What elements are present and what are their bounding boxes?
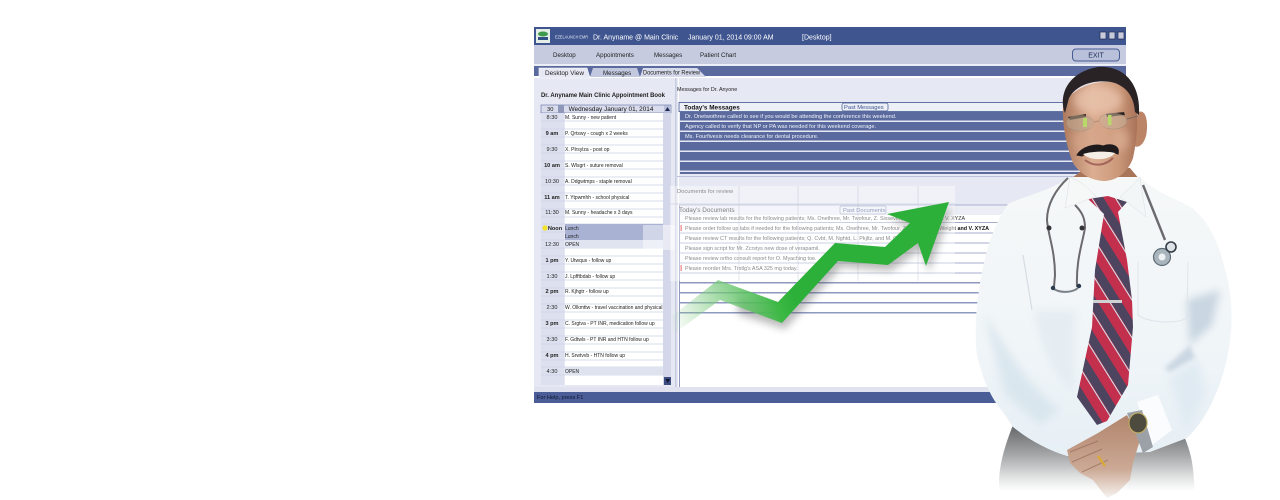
appointment times: 12:30 [545, 242, 559, 248]
hair [1063, 67, 1139, 115]
appointment times: 9 am [546, 131, 558, 137]
appointment times: 2:30 [547, 305, 557, 311]
appointment times: 2 pm [545, 289, 559, 295]
panel: messages: Agency called to verify that NP or PA was needed for this weekend coverage. [685, 124, 876, 130]
appointment times: 9:30 [547, 147, 557, 153]
panel: documents: Past Documents [843, 208, 886, 214]
stethoscope right tube and chest piece [1143, 185, 1176, 266]
necktie [1077, 196, 1133, 425]
panel: appointment book [541, 92, 671, 385]
appointment times: 4:30 [547, 369, 557, 375]
panel: documents: Please review CT results for the following patients; Q. Cvbt, M. Nghtd, L. Pkjltz, and M. Oneone [685, 236, 912, 242]
appointment entries: OPEN [565, 369, 580, 375]
translucent spreadsheet overlay [643, 186, 955, 281]
appointment times: 11 am [544, 195, 560, 201]
tab strip: Messages [603, 70, 631, 77]
title bar: January 01, 2014 09:00 AM [688, 34, 774, 42]
panel: messages: Ms. Fourfivesix needs clearance for dental procedure. [685, 134, 819, 140]
title bar: EZELAUNCH EMR [555, 34, 588, 40]
moustache [1077, 145, 1118, 156]
appointment entries: OPEN [565, 242, 580, 248]
appointment entries: Lunch [565, 226, 579, 232]
panel: documents: Today's Documents [679, 207, 735, 214]
tab strip: Desktop View [545, 70, 584, 77]
panel: documents: Please review lab results for the following patients; Ms. Onethree, Mr. Twofour, Z. Sixseven, F. Eightnine and V. XYZA [685, 216, 966, 222]
panel: appointment book: 30 [547, 107, 553, 113]
title bar: [Desktop] [802, 34, 832, 42]
appointment entries: T. Ytpwmhh - school physical [565, 195, 629, 201]
panel: messages: Today's Messages [684, 104, 740, 111]
title bar: Dr. Anyname @ Main Clinic [593, 34, 679, 42]
panel: messages: Dr. Onetwothree called to see if you would be attending the conference this weekend. [685, 114, 897, 120]
appointment times: 10:30 [545, 179, 559, 185]
trousers [999, 425, 1195, 500]
eyebrows [1068, 114, 1086, 120]
panel: documents: Documents for review [677, 189, 734, 195]
appointment times: 3:30 [547, 337, 557, 343]
panel: documents [534, 189, 1126, 392]
doctor portrait [970, 67, 1240, 500]
appointment entries: S. Wlsgrt - suture removal [565, 163, 623, 169]
appointment entries: P. Qrtswy - cough x 2 weeks [565, 131, 628, 137]
panel: messages [677, 87, 1126, 177]
divider between panes [675, 78, 676, 390]
wristwatch [1127, 410, 1153, 453]
appointment entries: A. Ddgwtmps - staple removal [565, 179, 632, 185]
menu bar: EXIT [1088, 52, 1105, 60]
menu bar: Appointments [596, 52, 634, 59]
appointment times: 1 pm [545, 258, 559, 264]
appointment times: 1:30 [547, 274, 557, 280]
appointment times [544, 115, 563, 375]
appointment times: 4 pm [545, 353, 559, 359]
appointment times: Noon [548, 226, 563, 232]
application window [534, 27, 1126, 403]
appointment entries [565, 115, 663, 375]
appointment entries: W. Olkmttw - travel vaccination and physical [565, 305, 663, 311]
head [1063, 67, 1147, 181]
smile [1083, 152, 1115, 159]
appointment times: 8:30 [547, 115, 557, 121]
appointment entries: J. Lpfftbdab - follow up [565, 274, 615, 280]
panel: appointment book: Dr. Anyname Main Clinic Appointment Book [541, 92, 665, 99]
shirt collar [1065, 177, 1146, 217]
nose [1089, 120, 1109, 145]
tab strip: Documents for Review [643, 70, 700, 76]
panel: appointment book: Wednesday January 01, 2014 [569, 106, 654, 113]
appointment times: 11:30 [545, 210, 559, 216]
panel: messages: Past Messages [844, 105, 884, 111]
appointment entries: F. Gdtwls - PT INR and HTN follow up [565, 337, 649, 343]
panel: documents: Please reorder Mrs. Trstlg's ASA 325 mg today. [685, 266, 798, 272]
appointment entries: M. Sunny - new patient [565, 115, 617, 121]
appointment entries: Lunch [565, 234, 579, 240]
panel: documents: Please sign script for Mr. Zcrstys new dose of verapamil. [685, 246, 820, 252]
menu bar [534, 45, 1126, 66]
panel: documents: Please review ortho consult report for O. Myaching toe. [685, 256, 817, 262]
appointment entries: R. Kjhgtr - follow up [565, 289, 609, 295]
appointment times: 3 pm [545, 321, 559, 327]
appointment entries: H. Srwtvvb - HTN follow up [565, 353, 625, 359]
appointment entries: C. Srgtva - PT INR, medication follow up [565, 321, 655, 327]
title bar [534, 27, 1126, 45]
hands [1067, 415, 1140, 498]
arrow: green growth trend [672, 202, 952, 335]
menu bar: Patient Chart [700, 52, 736, 59]
panel: documents: Please order follow up labs if needed for the following patients; Ms. Onethree, Mr. Twofour, Z. Sixseven, F. Weight and V. XYZA [685, 226, 989, 232]
stethoscope left tubes [1047, 178, 1085, 292]
tab strip [534, 66, 1126, 78]
status bar [534, 392, 1126, 403]
neck [1072, 168, 1140, 200]
panel: messages: Messages for Dr. Anyone [677, 87, 737, 93]
appointment entries: M. Sunny - headache x 3 days [565, 210, 633, 216]
appointment times: 10 am [544, 163, 560, 169]
full infographic scene [534, 27, 1232, 498]
menu bar: Messages [654, 52, 682, 59]
appointment entries: Y. Utwqus - follow up [565, 258, 612, 264]
status bar: For Help, press F1 [537, 395, 583, 401]
menu bar: Desktop [553, 52, 576, 59]
appointment entries: X. Plrsylza - post op [565, 147, 610, 153]
glasses [1066, 113, 1138, 131]
shirt [970, 170, 1240, 460]
